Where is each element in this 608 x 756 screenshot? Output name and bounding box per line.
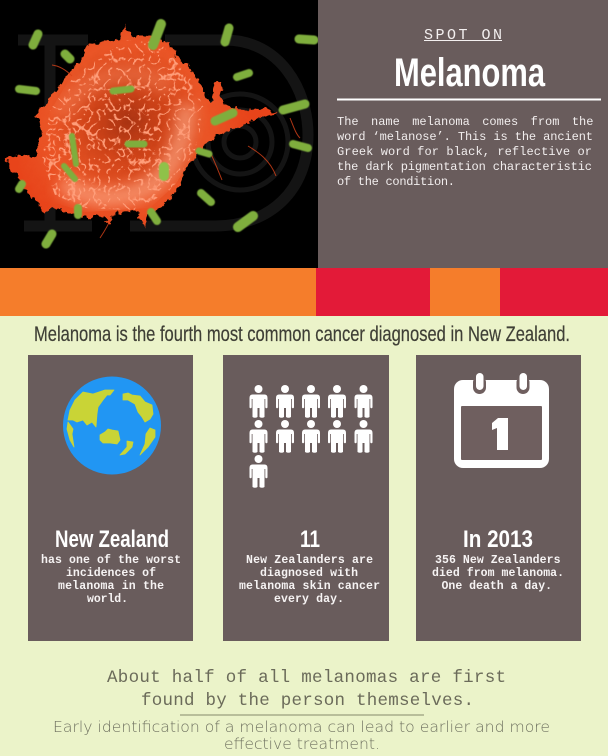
panel: In 2013	[416, 355, 581, 641]
heading: New Zealand: New Zealand	[55, 526, 169, 553]
icon: globe	[63, 376, 161, 474]
heading: In 2013: In 2013	[463, 526, 533, 553]
text: deaths	[432, 554, 564, 593]
closing text: early identification	[53, 718, 550, 753]
panel: title block	[318, 0, 608, 268]
text: worst incidences: melanoma in the	[58, 580, 164, 593]
text: worst incidences	[41, 554, 181, 606]
text: daily diagnoses: New Zealanders are	[246, 554, 373, 567]
heading: 11: 11	[300, 526, 320, 553]
callout rule	[180, 714, 424, 716]
intro paragraph	[337, 115, 593, 189]
kicker: Spot On: SPOT ON	[424, 27, 502, 44]
text: worst incidences: world.	[87, 593, 128, 606]
closing text: early identification: effective treatment.	[224, 735, 380, 753]
intro paragraph: word ‘melanose’. This is the ancient	[337, 130, 593, 144]
callout: found by the person: About half of all melanomas are first	[107, 668, 506, 688]
text: daily diagnoses: diagnosed with	[260, 567, 358, 580]
intro paragraph: Greek word for black, reflective or	[337, 145, 592, 159]
icon: eleven people	[250, 385, 372, 488]
text: daily diagnoses: melanoma skin cancer	[239, 580, 380, 593]
callout: found by the person	[107, 668, 506, 711]
intro paragraph: of the condition.	[337, 175, 455, 189]
icon: calendar	[454, 373, 549, 468]
closing text: early identification: Early identification of a melanoma can lead to earlier and more	[53, 718, 550, 736]
text: deaths: died from melanoma.	[432, 567, 564, 580]
text: worst incidences: has one of the worst	[41, 554, 181, 567]
panel: New Zealand	[28, 355, 193, 641]
title rule	[337, 98, 601, 100]
photo: melanoma cell with bacteria	[0, 0, 318, 268]
intro paragraph: The name melanoma comes from the	[337, 115, 593, 129]
colour band	[0, 268, 608, 316]
panel: 11 a day	[223, 355, 389, 641]
text: deaths: One death a day.	[442, 580, 552, 593]
text: worst incidences: incidences of	[66, 567, 156, 580]
text: deaths: 356 New Zealanders	[435, 554, 561, 567]
callout: found by the person: found by the person themselves.	[141, 691, 474, 711]
text: daily diagnoses: every day.	[274, 593, 344, 606]
text: daily diagnoses	[239, 554, 380, 606]
title: Melanoma: Melanoma	[394, 51, 546, 95]
intro paragraph: the dark pigmentation characteristic	[337, 160, 592, 174]
